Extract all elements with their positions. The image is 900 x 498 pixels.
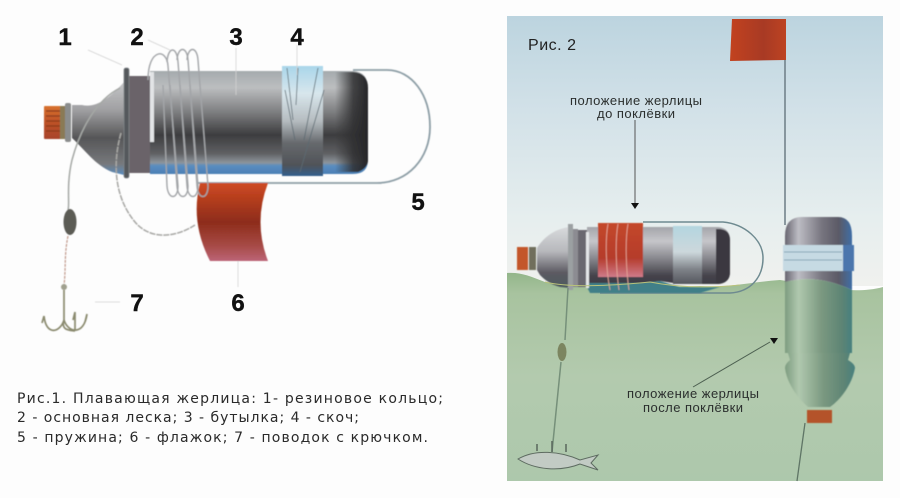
caption for figure 1 [17, 391, 443, 446]
label: position before bite: положение жерлицы [570, 93, 702, 108]
arrow: before bite [631, 120, 639, 209]
cap [44, 106, 65, 139]
bottle shoulder and neck [72, 82, 124, 175]
label 7: 7 [130, 290, 144, 317]
dome [537, 227, 570, 288]
fish [518, 441, 598, 470]
caption for figure 1: 2 - основная леска; 3 - бутылка; 4 - скоч; [17, 410, 359, 426]
leader in water [552, 288, 568, 452]
label: position after bite: после поклёвки [643, 400, 743, 415]
floating bottle [517, 223, 730, 293]
flag (6) [197, 183, 268, 261]
label: position before bite: до поклёвки [597, 106, 675, 121]
bottle body (3) [150, 71, 368, 174]
sinker in water [558, 343, 566, 361]
sky [507, 16, 883, 286]
arrow: after bite [693, 338, 778, 387]
flag [730, 19, 786, 61]
spring loop (5) [198, 70, 430, 183]
neck section [785, 353, 855, 368]
water [507, 273, 883, 481]
rubber ring (1) [124, 68, 129, 178]
label: position before bite [570, 93, 702, 121]
line under flag [116, 133, 195, 235]
caption: figure 2: Рис. 2 [528, 37, 576, 54]
dark end [716, 229, 730, 284]
number labels [58, 24, 425, 317]
collar [578, 230, 587, 287]
spring on floating bottle [600, 222, 763, 293]
label: position after bite: положение жерлицы [627, 386, 759, 401]
waterline across floating bottle [545, 282, 740, 287]
pointer lines [88, 40, 297, 302]
light strip on body [150, 72, 154, 142]
caption for figure 1: 5 - пружина; 6 - флажок; 7 - поводок с крючком. [17, 430, 428, 446]
panel: figure 2 [507, 16, 883, 481]
label 5: 5 [411, 189, 425, 216]
figure 1: floating zherlitsa diagram [42, 40, 430, 331]
caption for figure 1: Рис.1. Плавающая жерлица: 1- резиновое кольцо; [17, 391, 443, 407]
label: position after bite [627, 386, 759, 415]
bottle dark end [335, 72, 368, 172]
flag pole [784, 58, 786, 225]
neck flange [65, 103, 71, 142]
gap [573, 229, 578, 287]
label 4: 4 [290, 24, 304, 51]
red wrap [598, 223, 643, 277]
label 6: 6 [231, 290, 245, 317]
upright bottle [783, 217, 855, 423]
cap of upright bottle [807, 410, 832, 423]
tape [673, 226, 702, 284]
cap [517, 247, 528, 270]
dome [785, 368, 855, 407]
line below upright bottle [797, 423, 805, 481]
label 3: 3 [229, 24, 243, 51]
tape on upright bottle [783, 245, 843, 271]
bottle collar [129, 76, 150, 173]
scotch tape (4) [282, 66, 324, 176]
label 2: 2 [130, 24, 144, 51]
label 1: 1 [58, 24, 72, 51]
sinker [64, 209, 76, 235]
body [587, 227, 730, 284]
teal band [585, 281, 720, 293]
leader with hook [42, 236, 87, 331]
ring [568, 224, 573, 290]
leader line [68, 88, 120, 210]
main line coils (2) [148, 50, 208, 196]
